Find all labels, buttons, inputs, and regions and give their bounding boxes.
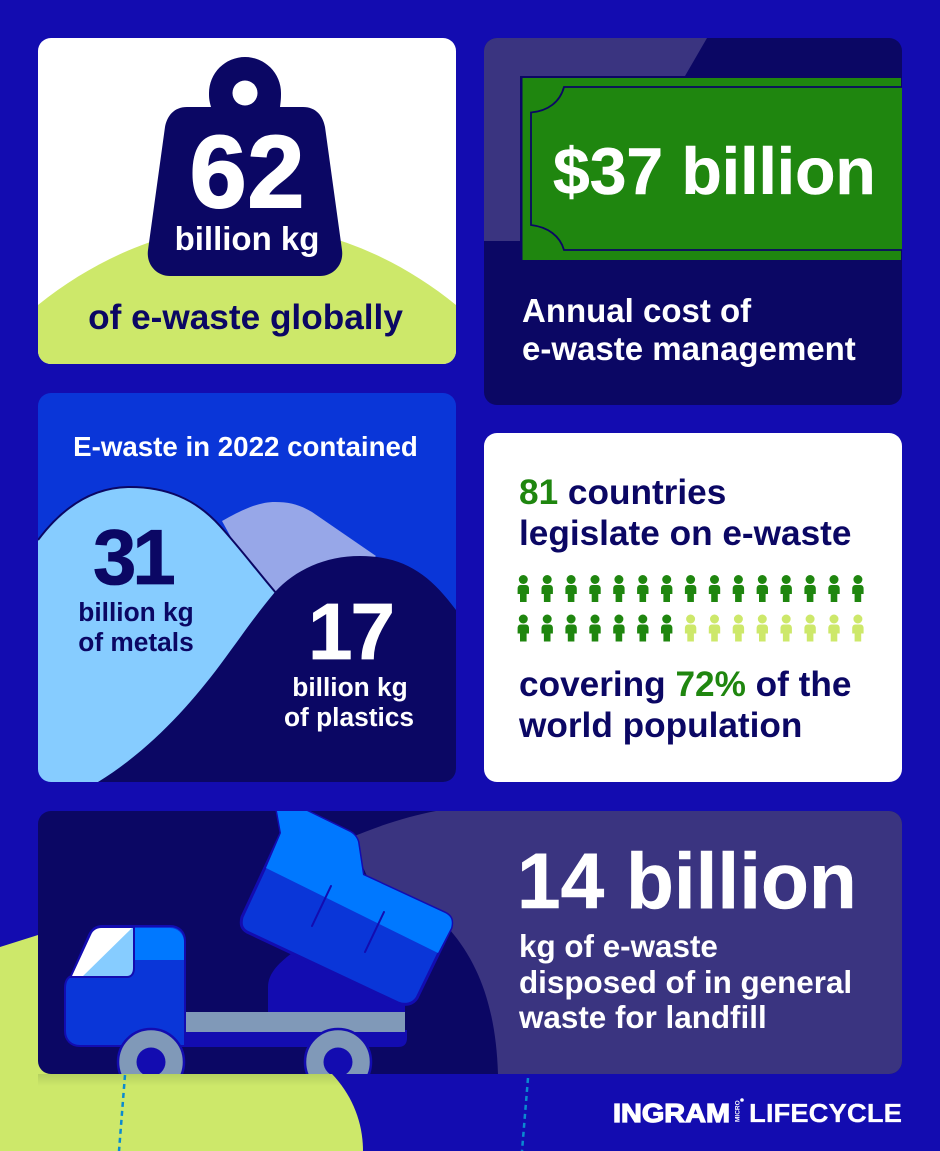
- caption: annual cost: Annual cost of: [522, 292, 752, 329]
- rear wheel: [304, 1028, 372, 1074]
- logo: Ingram Micro Lifecycle: MICRO: [734, 1100, 742, 1122]
- number: 17: 17: [308, 587, 393, 676]
- window: [71, 927, 134, 977]
- number: 31: 31: [93, 513, 174, 601]
- number: 62: 62: [190, 115, 305, 229]
- label: billion kg of metals: of metals: [78, 627, 194, 657]
- icon: dump truck: [65, 811, 452, 1095]
- text: 81 countries legislate: legislate on e-waste: [519, 514, 851, 553]
- dotted line right: [522, 1078, 528, 1151]
- lighter band: [484, 38, 707, 241]
- label: billion kg of plastics: billion kg: [292, 672, 408, 702]
- cab: [65, 926, 185, 1046]
- metals hill: [38, 487, 280, 782]
- metals hill outline: [38, 487, 276, 593]
- label: billion kg of metals: billion kg: [78, 597, 194, 627]
- number: $37 billion: $37 billion: [553, 134, 876, 208]
- icon: people row 1: [518, 575, 864, 602]
- logo: Ingram Micro Lifecycle: [613, 1098, 902, 1128]
- panel shadow on ground: [38, 1074, 343, 1086]
- panel: 37 billion cost: [484, 38, 903, 405]
- label: billion kg: billion kg: [175, 220, 319, 257]
- caption: disposed in landfill: [518, 934, 850, 1028]
- text: 81 countries legislate: 81 countries: [519, 473, 726, 512]
- icon: weight: [148, 57, 342, 276]
- plastics hill: [98, 556, 456, 782]
- label: billion kg of plastics: of plastics: [284, 702, 414, 732]
- green ground shape: [0, 935, 363, 1151]
- caption: of e-waste globally: of e-waste globally: [88, 298, 403, 337]
- hydraulic support: [268, 953, 405, 1012]
- logo: Ingram Micro Lifecycle: INGRAM: [613, 1098, 730, 1128]
- caption: disposed in landfill: kg of e-waste: [519, 929, 718, 964]
- text: covering 72%: covering 72% of the: [519, 665, 851, 704]
- text: covering 72%: world population: [518, 706, 802, 745]
- caption: annual cost: [522, 292, 856, 367]
- number: 14 billion: 14 billion: [517, 837, 857, 925]
- lighter area: [350, 811, 902, 1074]
- panel: landfill: [38, 811, 902, 1095]
- back hill: [222, 502, 376, 592]
- icon: people row 2: [518, 614, 864, 642]
- caption: disposed in landfill: waste for landfill: [518, 1000, 767, 1035]
- caption: annual cost: e-waste management: [522, 330, 856, 367]
- panel: countries legislate: [484, 433, 902, 782]
- label: billion kg of metals: [79, 602, 193, 652]
- tipping bed: [241, 811, 452, 1004]
- chassis: [184, 1030, 407, 1047]
- green hill: [38, 240, 456, 364]
- flatbed: [186, 1012, 405, 1032]
- panel: e-waste contents: [38, 393, 456, 782]
- text: 81 countries legislate: [519, 473, 851, 553]
- label: billion kg of plastics: [285, 677, 413, 732]
- dotted line left: [119, 1075, 125, 1151]
- front wheel: [116, 1028, 186, 1074]
- text: covering 72%: [518, 665, 851, 745]
- icon: banknote: [520, 76, 903, 262]
- logo: Ingram Micro Lifecycle: LIFECYCLE: [749, 1098, 902, 1128]
- caption: disposed in landfill: disposed of in general: [519, 965, 852, 1000]
- heading: E-waste in 2022 contained: E-waste in 2022 contained: [73, 431, 418, 462]
- panel: 62 billion kg: [38, 38, 456, 364]
